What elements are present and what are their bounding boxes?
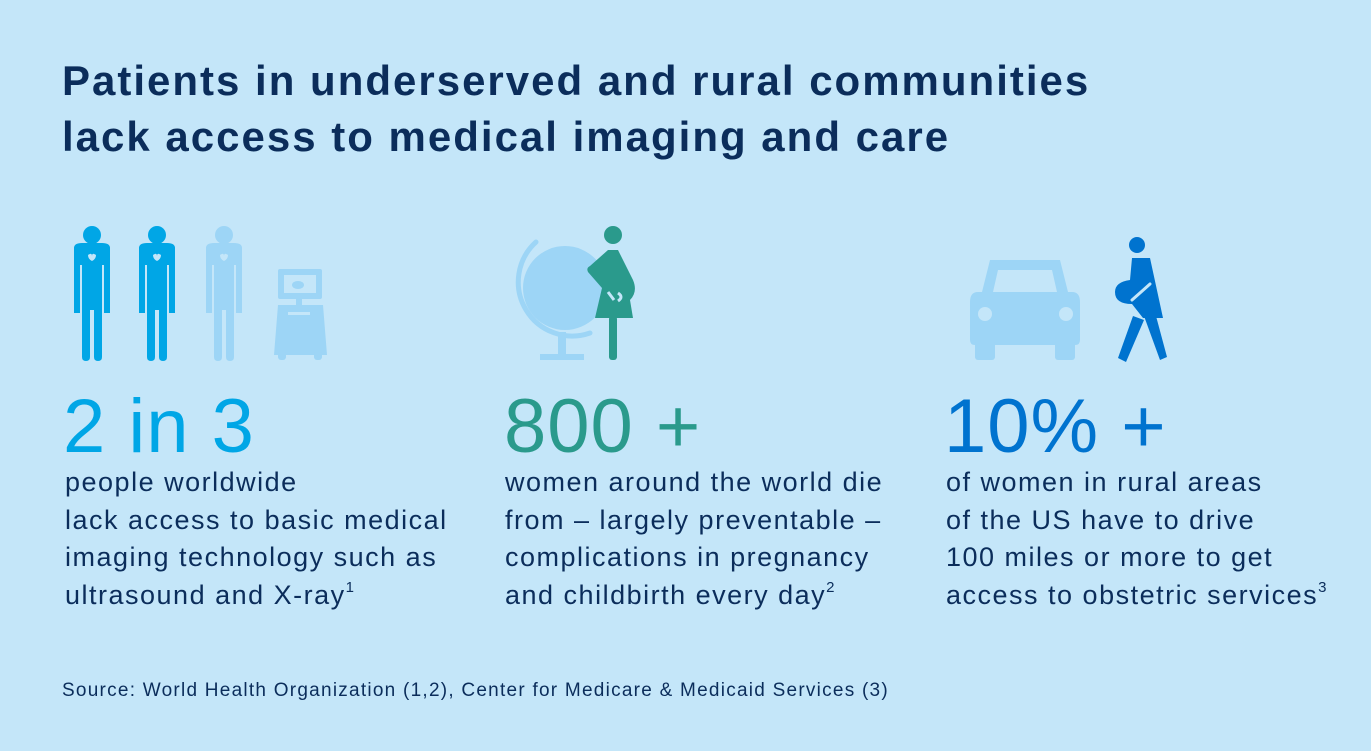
stat 2 number: 800 +	[504, 384, 701, 469]
stat 2 text: and childbirth every day2	[505, 578, 836, 610]
stat 3 text: of the US have to drive	[946, 504, 1255, 534]
icon: walking woman	[1115, 237, 1167, 362]
icon: person 1	[74, 226, 110, 361]
stat 1 text: ultrasound and X-ray1	[65, 578, 356, 610]
stat 1 text: lack access to basic medical	[65, 504, 448, 534]
icon: person 3	[206, 226, 242, 361]
stat 3 text: access to obstetric services3	[946, 578, 1328, 610]
icon: ultrasound machine	[274, 269, 327, 360]
stat 1 text: people worldwide	[65, 467, 298, 497]
stat 3 number: 10% +	[944, 384, 1167, 469]
stat 3 text	[946, 467, 1328, 610]
stat 2 text: women around the world die	[505, 467, 883, 497]
stat 3 text: of women in rural areas	[946, 467, 1263, 497]
icon: car and walking woman	[970, 237, 1167, 362]
icon: globe and pregnant woman	[516, 226, 635, 360]
title: Patients in underserved and rural communities	[62, 57, 1090, 104]
source footnote: Source: World Health Organization (1,2), Center for Medicare & Medicaid Services (3)	[62, 680, 889, 701]
stat 2 text: complications in pregnancy	[505, 542, 870, 572]
title: lack access to medical imaging and care	[62, 113, 950, 160]
stat 2 text: from – largely preventable –	[505, 504, 882, 534]
icon: globe	[518, 242, 607, 360]
stat 1 text	[65, 467, 448, 610]
icon: car	[970, 260, 1080, 360]
stat 3 text: 100 miles or more to get	[946, 542, 1273, 572]
stat 1 text: imaging technology such as	[65, 542, 437, 572]
stat 2 text	[505, 467, 883, 610]
title	[62, 57, 1090, 160]
stat 1 number: 2 in 3	[63, 384, 255, 469]
icon: pregnant woman	[587, 226, 635, 360]
icon: person 2	[139, 226, 175, 361]
icon: people and ultrasound	[74, 226, 327, 361]
